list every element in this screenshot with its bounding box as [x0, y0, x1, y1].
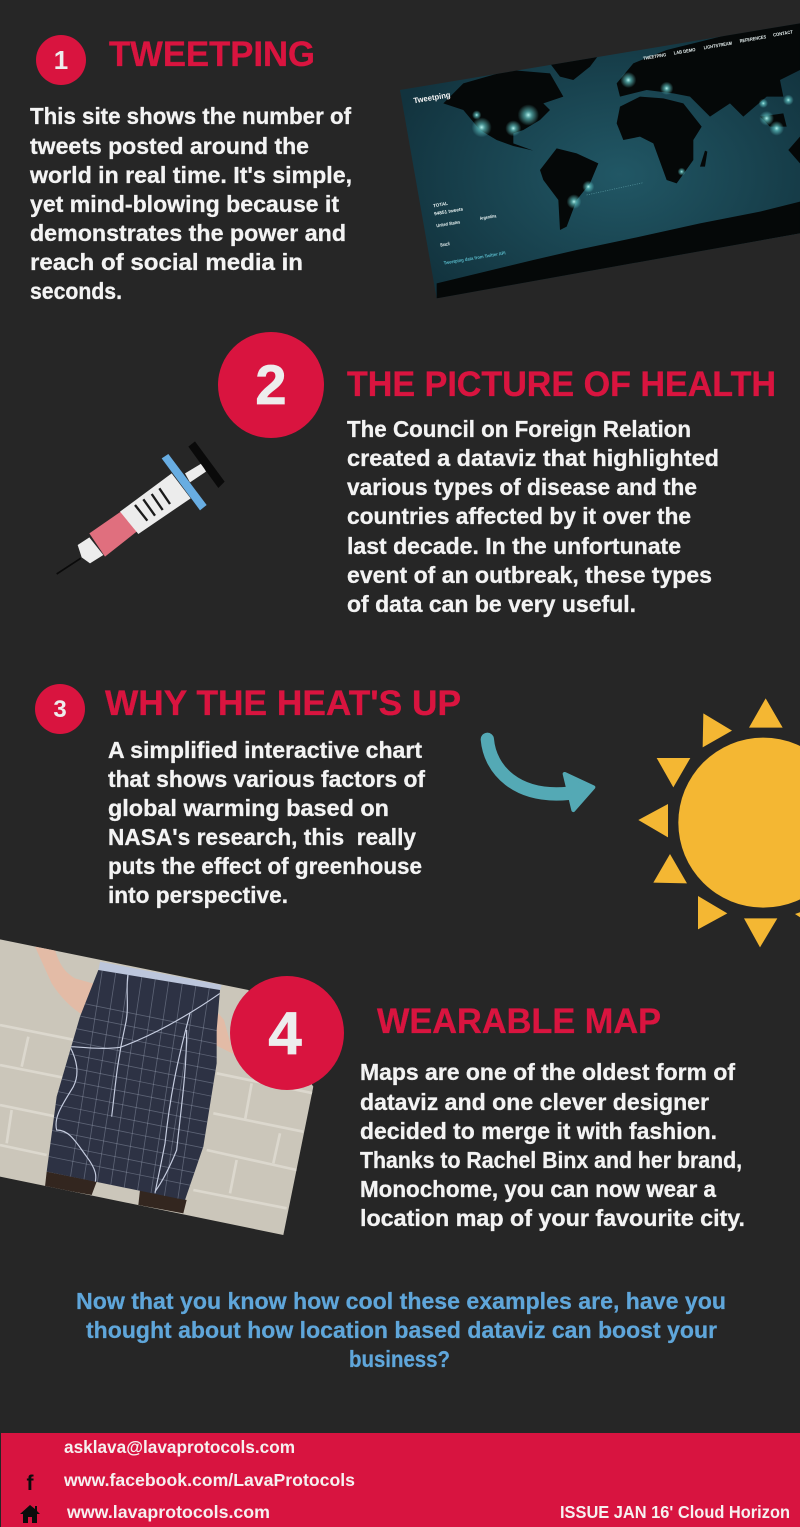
text block: tweetping description: demonstrates the power and: [30, 220, 346, 246]
footer: email: asklava@lavaprotocols.com: [64, 1437, 295, 1457]
heading: wearable map: WEARABLE MAP: [377, 1002, 661, 1041]
closing question: Now that you know how cool these examples are, have you: [76, 1288, 726, 1314]
text block: wearable map description: location map of your favourite city.: [360, 1205, 745, 1231]
map labels: CONTACT: [773, 29, 793, 38]
text block: picture of health description: The Council on Foreign Relation: [347, 416, 691, 442]
text block: tweetping description: world in real time. It's simple,: [29, 162, 352, 188]
icon: facebook: f: [26, 1472, 34, 1495]
text block: tweetping description: reach of social media in: [30, 249, 303, 275]
text block: wearable map description: Monochome, you can now wear a: [360, 1176, 716, 1202]
text block: heat description: NASA's research, this really: [108, 824, 416, 850]
text block: tweetping description: This site shows the number of: [30, 103, 351, 129]
text block: tweetping description: yet mind-blowing because it: [30, 191, 339, 217]
text block: picture of health description: countries affected by it over the: [347, 503, 691, 529]
number badge 3: [35, 684, 85, 734]
text block: wearable map description: decided to merge it with fashion.: [360, 1118, 717, 1144]
map labels: Brazil: [440, 241, 450, 248]
text block: heat description: global warming based on: [108, 795, 389, 821]
panel: the picture of health: [57, 332, 776, 617]
panel: wearable map: [0, 930, 745, 1240]
text block: tweetping description: seconds.: [30, 278, 122, 304]
image: tweetping world map screenshot: [400, 20, 800, 300]
text block: picture of health description: of data can be very useful.: [347, 591, 636, 617]
map labels: [413, 29, 793, 266]
text block: wearable map description: Maps are one of the oldest form of: [360, 1059, 735, 1085]
text block: picture of health description: [347, 416, 719, 617]
image: map-print skirt photo: [0, 930, 320, 1240]
text block: wearable map description: dataviz and one clever designer: [360, 1089, 709, 1115]
closing question: business?: [349, 1346, 450, 1372]
number badge 1: [36, 35, 86, 85]
map labels: Tweetping data from Twitter API: [443, 250, 506, 266]
text block: heat description: puts the effect of greenhouse: [108, 853, 422, 879]
text block: picture of health description: event of an outbreak, these types: [347, 562, 712, 588]
text block: heat description: into perspective.: [108, 882, 288, 908]
number badge 3: 3: [53, 696, 67, 723]
heading: the picture of health: THE PICTURE OF HEALTH: [347, 365, 776, 404]
text block: wearable map description: [360, 1059, 745, 1231]
footer: [1, 1433, 800, 1527]
map labels: 94851 tweets: [434, 206, 464, 216]
footer: issue label: ISSUE JAN 16' Cloud Horizon: [560, 1502, 790, 1522]
icon: home: [20, 1505, 40, 1523]
map labels: Argentina: [479, 213, 497, 221]
text block: heat description: A simplified interactive chart: [108, 737, 422, 763]
heading: why the heat's up: WHY THE HEAT'S UP: [105, 684, 461, 723]
map labels: United States: [436, 219, 461, 228]
number badge 1: 1: [54, 45, 68, 75]
number badge 4: 4: [268, 1000, 302, 1067]
text block: heat description: [108, 737, 425, 908]
closing question: [76, 1288, 726, 1372]
map labels: REFERENCES: [739, 34, 766, 44]
number badge 4: [230, 976, 344, 1090]
heading: tweetping: TWEETPING: [109, 35, 315, 74]
icon: sun: [638, 698, 800, 947]
map labels: TOTAL: [433, 201, 449, 208]
text block: tweetping description: tweets posted around the: [30, 133, 309, 159]
map labels: Tweetping: [413, 90, 451, 105]
number badge 2: [218, 332, 324, 438]
panel: tweetping: [29, 20, 800, 304]
map labels: LAB DEMO: [673, 47, 696, 56]
map labels: LIGHTSTREAM: [703, 41, 733, 50]
number badge 2: 2: [255, 353, 287, 416]
panel: why the heat's up: [35, 684, 800, 947]
text block: heat description: that shows various factors of: [108, 766, 425, 792]
text block: wearable map description: Thanks to Rachel Binx and her brand,: [360, 1147, 742, 1173]
closing question: thought about how location based dataviz can boost your: [86, 1317, 717, 1343]
arrow: curved teal arrow: [487, 739, 593, 810]
text block: picture of health description: last decade. In the unfortunate: [347, 533, 681, 559]
text block: tweetping description: [29, 103, 352, 304]
map labels: TWEETPING: [643, 52, 667, 61]
footer: website: www.lavaprotocols.com: [66, 1502, 270, 1522]
text block: picture of health description: various types of disease and the: [347, 474, 697, 500]
icon: syringe: [57, 441, 225, 574]
text block: picture of health description: created a dataviz that highlighted: [347, 445, 719, 471]
footer: facebook url: www.facebook.com/LavaProtocols: [63, 1470, 355, 1490]
